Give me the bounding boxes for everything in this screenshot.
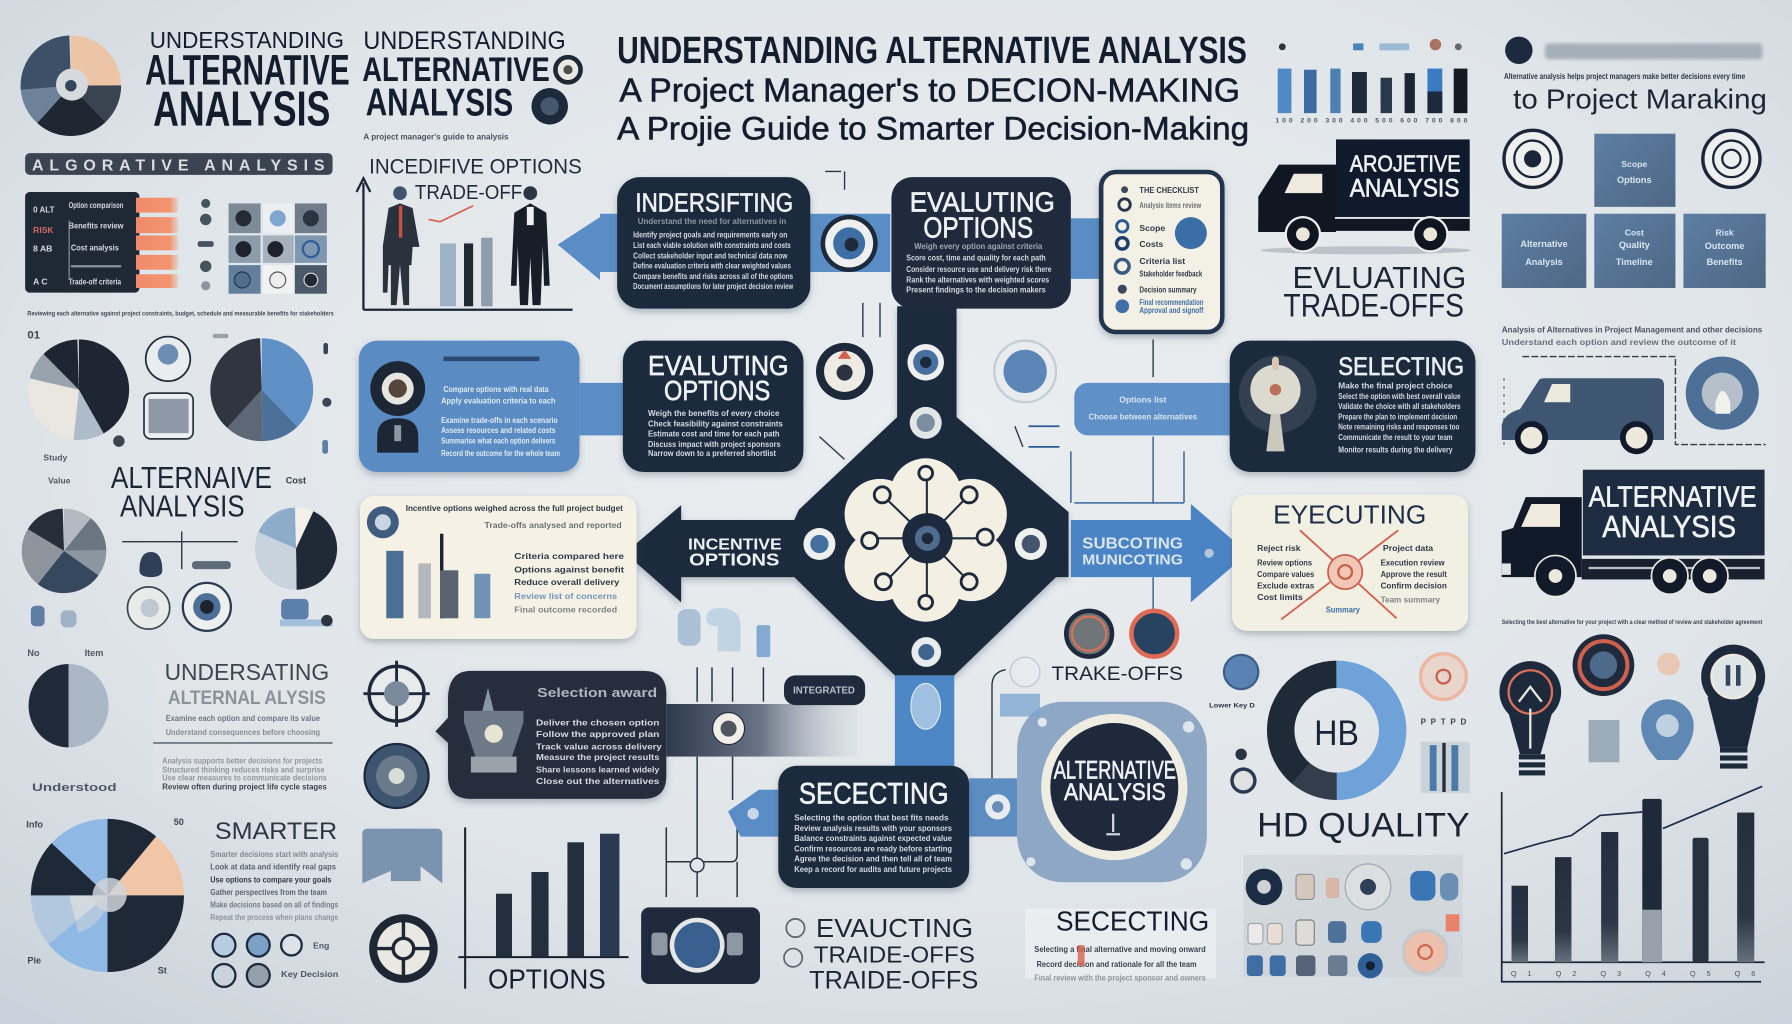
text block: understanding alternative analysis, faded: Understand consequences before choosing [166,727,320,737]
chart: bars and line, bottom right [1502,786,1765,982]
text block: understanding alternative analysis, faded: Use clear measures to communicate decisions [162,773,327,783]
panel: checklist card: Criteria list [1139,256,1185,266]
thin connector lines [1071,339,1184,626]
small glyphs around upper pies [113,334,331,454]
badge: alternative analysis circle: ALTERNATIVE [1054,756,1176,784]
tiles: blue-grey option cards: Outcome [1705,241,1744,251]
panel: selecting: Select the option with best overall value [1338,391,1461,401]
main title [617,29,1249,146]
panel: trophy dark card: Close out the alternatives [536,776,660,786]
panel: cream bar chart card: Final outcome recorded [514,605,617,615]
heading: understanding alternative analysis, second: UNDERSTANDING [363,27,566,55]
text block: understanding alternative analysis, faded: UNDERSATING [165,659,329,685]
icon: hub side badges [803,528,1047,560]
panel: evaluating options top: EVALUTING [910,186,1055,217]
text block: smarter with icons: Use options to compare your goals [210,874,332,884]
tiles: blue-grey option cards: Options [1617,175,1652,185]
heading: evaluating trade-offs, bottom center: TRAIDE-OFFS [814,941,975,967]
panel: evaluating options top: Present findings to the decision makers [906,285,1046,295]
donut chart: HD: HB [1314,713,1359,753]
panel: dark table with salmon bars: Cost analysis [71,242,119,252]
panel: eyecuting card with red cross: Project data [1383,543,1433,553]
heading: understanding alternative analysis, second: A project manager's guide to analysis [363,132,509,141]
panel: selecting: Make the final project choice [1338,381,1453,391]
panel: selecting, lower center: Review analysis results with your sponsors [794,823,952,833]
panel: peach trade-off badges [1051,611,1183,685]
text block: selecting, bottom: Selecting a final alternative and moving onward [1034,944,1206,954]
panel: selecting: SELECTING [1338,353,1464,381]
panel: eyecuting card with red cross: Execution review [1381,558,1445,568]
heading: evaluating trade-offs, bottom center: TRAIDE-OFFS [809,967,978,995]
bulb: left [1499,661,1561,775]
panel: trophy dark card: Share lessons learned widely [536,765,660,775]
rule of small text: Reviewing each alternative against project constraints, budget, schedule and measurable benefits for stakeholders [27,310,334,317]
icon grid: 3 by 3 tiles [229,203,327,294]
connector: icon panel with blue lens [641,907,760,984]
heading: evaluating trade-offs [1283,260,1466,324]
heading: HD quality: HD QUALITY [1257,807,1470,845]
icon column: small glyphs [198,199,214,290]
icons: pale devices above band [678,608,770,657]
panel: eyecuting card with red cross: Reject risk [1257,543,1301,553]
panel: trophy dark card: Deliver the chosen option [536,718,659,728]
panel: checklist card: Analysis items review [1139,200,1201,210]
panel: trophy dark card: Selection award [537,686,657,700]
small text near pies: 50 [174,817,184,827]
heading: evaluating trade-offs: EVLUATING [1293,260,1466,295]
panel: understanding: Identify project goals and requirements early on [633,230,787,240]
heading: alternative analysis, left middle: ALTERNAIVE [111,460,272,495]
arrow label: incentive options: OPTIONS [689,550,779,570]
panel: understanding [617,177,810,309]
connector: fading dark band with badge [666,704,857,757]
arrow: blue right pointing: MUNICOTING [1082,553,1183,569]
text lines above van [1502,325,1763,347]
text block: smarter with icons: Make decisions based on all of findings [210,899,338,909]
panel: checklist card: THE CHECKLIST [1139,185,1200,195]
text block: understanding alternative analysis, faded: Structured thinking reduces risks and surprise [162,765,325,775]
text lines above van: Understand each option and review the outcome of it [1502,337,1736,347]
panel: trophy dark card [435,671,666,799]
panel: selecting [1230,341,1475,472]
panel: eyecuting card with red cross: Approve the result [1381,569,1447,579]
text block: understanding alternative analysis, faded: ALTERNAL ALYSIS [168,687,326,709]
panel: cream bar chart card: Reduce overall delivery [514,577,620,587]
small text near pies: 01 [27,329,41,341]
small text near pies: Pie [27,955,41,965]
small labels left: Cost [286,475,306,485]
panel: dark table with salmon bars: 8 AB [33,243,52,253]
icon: red and white badge [816,343,873,400]
panel: eyecuting card with red cross: Compare values [1257,569,1314,579]
small labels left: Study [43,453,67,463]
panel: eyecuting card with red cross: Team summary [1381,594,1440,604]
badge: alternative analysis circle: ANALYSIS [1064,779,1166,806]
icon: lens badge between panels [821,215,878,272]
panel: selecting, lower center [728,766,1017,888]
heading: alternative analysis, left middle: ANALYSIS [120,489,245,524]
heading: evaluating trade-offs, bottom center [784,913,978,995]
heading: understanding alternative analysis, left [145,27,350,137]
panel: dark table with salmon bars [25,192,178,293]
panel: cream bar chart card [360,496,637,639]
icon: light bulbs and badges [1499,634,1765,775]
heading: understanding alternative analysis, second [362,27,566,141]
arrow: blue connector to evaluating options [579,383,639,435]
text block: smarter with icons: Eng [313,941,329,951]
panel: blue camera card: Summarise what each option delivers [441,435,556,445]
text lines above van: Analysis of Alternatives in Project Management and other decisions [1502,325,1763,335]
icons: target badges left of trophy panel [363,661,430,808]
pie chart: second left [54,365,104,415]
truck: arojective analysis [1258,139,1471,254]
pie chart: large bottom left [69,857,146,934]
person: left figure [383,186,419,305]
tiles: blue-grey option cards: Scope [1621,159,1647,169]
panel: selecting, lower center: Selecting the option that best fits needs [794,813,949,823]
panel: blue camera card [359,341,579,472]
panel: selecting: Prepare the plan to implement decision [1338,411,1457,421]
panel: evaluating options second: Discuss impact with project sponsors [648,439,781,449]
bulb: right [1701,645,1765,769]
panel: blue camera card: Record the outcome for the whole team [441,448,560,458]
panel: selecting, lower center: SECECTING [799,777,949,810]
panel: understanding: Understand the need for alternatives in [638,216,786,226]
panel: understanding: Compare benefits and risks across all of the options [633,271,793,281]
pie chart: half dark, half grey [29,664,109,747]
main title: A Projie Guide to Smarter Decision-Making [617,110,1249,146]
small marks around central stem [819,171,1059,459]
small text near pies: St [158,966,167,976]
text block: selecting, bottom: Final review with the project sponsor and owners [1034,973,1206,983]
panel: evaluating options second: EVALUTING [648,350,789,381]
panel: selecting, lower center: Keep a record for audits and future projects [794,864,952,874]
panel: checklist card: Scope [1139,223,1165,233]
panel: evaluating options top: OPTIONS [923,213,1033,245]
tiles: blue-grey option cards: Analysis [1525,257,1563,267]
icon: blue segmented circle [1686,357,1759,430]
panel: evaluating options second: Estimate cost and time for each path [648,429,779,439]
heading: understanding alternative analysis, left: UNDERSTANDING [150,27,344,53]
panel: selecting: Communicate the result to your team [1338,432,1453,442]
heading: alternative analysis, left middle [111,460,272,524]
text block: smarter with icons: Repeat the process when plans change [210,912,338,922]
heading: understanding alternative analysis, left: ALTERNATIVE [145,47,350,94]
panel: cream bar chart card: Criteria compared here [514,551,624,561]
icons around donut [1209,654,1470,793]
panel: understanding: Collect stakeholder input and technical data now [633,250,788,260]
icon: glass lens badge [994,341,1056,402]
heading: understanding alternative analysis, left: ANALYSIS [153,83,330,137]
panel: evaluating options second: Check feasibility against constraints [648,418,783,428]
callout: small dark pill: INTEGRATED [793,686,855,697]
panel: evaluating options top: Rank the alternatives with weighted scores [906,274,1049,284]
panel: cream bar chart card: Review list of concerns [514,591,617,601]
pie chart: dark and pale [275,528,317,569]
panel: selecting: Monitor results during the delivery [1338,445,1453,455]
panel: evaluating options top: Score cost, time and quality for each path [906,253,1046,263]
panel: checklist card: Final recommendation [1139,297,1203,307]
panel: dark table with salmon bars: Trade-off criteria [69,277,121,287]
panel: selecting, lower center: Balance constraints against expected value [794,833,952,843]
tiles: blue-grey option cards [1502,134,1766,288]
heading: evaluating trade-offs, bottom center: EVAUCTING [816,913,973,943]
small text near pies: Info [26,819,43,829]
panel: dark table with salmon bars: A C [33,277,48,287]
icon: stem badges [907,344,944,439]
text block: smarter with icons: Look at data and identify real gaps [210,862,336,872]
chart: bars and line, bottom right: Q1 Q2 Q3 Q4 Q5 Q6 [1511,969,1755,978]
arrow: blue band across top panels [558,214,1104,280]
truck: alternative analysis [1502,470,1765,597]
bar chart: top right columns: 100 200 300 400 500 600 700 800 [1275,117,1468,124]
callout: blue pill: Options list [1119,394,1167,404]
text block: smarter with icons: Smarter decisions start with analysis [210,849,338,859]
icon: target badges [1504,130,1760,187]
panel: evaluating options top: Consider resource use and delivery risk there [906,264,1052,274]
text block: understanding alternative analysis, faded: Examine each option and compare its value [166,713,320,723]
tiles: blue-grey option cards: Quality [1619,240,1651,250]
arrow label: incentive options [688,537,782,570]
text block: understanding alternative analysis, faded: Analysis supports better decisions for projects [162,755,322,765]
tiles: blue-grey option cards: Benefits [1707,257,1743,267]
panel: dark table with salmon bars: Benefits review [69,221,124,231]
van diagram with dashed frame [1502,357,1766,451]
panel: peach trade-off badges: TRAKE-OFFS [1051,663,1183,685]
thin connector tree, lower left of center [666,667,763,897]
panel: evaluating options second: OPTIONS [664,375,770,406]
panel: eyecuting card with red cross: Exclude extras [1257,581,1315,591]
panel: understanding: List each viable solution with constraints and costs [633,240,791,250]
panel: trophy dark card: Follow the approved plan [536,729,659,739]
pie chart: blue and dark [236,364,287,415]
bar chart: options [458,827,629,995]
callout: small dark pill [784,675,865,705]
panel: checklist card: Stakeholder feedback [1139,269,1202,279]
text block: smarter with icons: Key Decision [281,969,338,979]
text block: selecting, bottom: Record decision and rationale for all the team [1037,959,1197,969]
panel: blue camera card: Examine trade-offs in each scenario [441,415,558,425]
header: top right badge and blurred bar: Alternative analysis helps project managers make better decisions every time [1504,72,1746,81]
icon: chevron tile [362,829,442,883]
text block: understanding alternative analysis, faded [153,659,333,792]
panel: understanding: INDERSIFTING [635,187,793,217]
small text near pies [26,329,184,976]
small labels under half pie: No [27,648,40,658]
truck: alternative analysis: ALTERNATIVE [1589,481,1757,513]
text block: smarter with icons [210,818,338,987]
text block: selecting, bottom [1025,905,1216,983]
small labels under half pie: Understood [32,782,117,794]
text block: smarter with icons: Gather perspectives from the team [210,887,327,897]
heading: evaluating trade-offs: TRADE-OFFS [1283,288,1464,324]
heading: incentive options trade-off: TRADE-OFF [415,181,522,204]
panel: eyecuting card with red cross: Summary [1326,605,1360,615]
panel: evaluating options second: Narrow down to a preferred shortlist [648,448,776,458]
icon: round badge and mini report [144,337,193,439]
truck: arojective analysis: AROJETIVE [1350,150,1461,176]
panel: eyecuting card with red cross: Cost limits [1257,592,1303,602]
arrow: blue right pointing: SUBCOTING [1082,536,1183,553]
badge: alternative analysis circle [1017,702,1207,882]
icons around donut: PPTPD [1421,718,1467,727]
panel: evaluating options top: Weigh every option against criteria [914,241,1042,251]
main title: UNDERSTANDING ALTERNATIVE ANALYSIS [617,29,1247,71]
arrow: blue right pointing [1071,504,1248,602]
central hub: cream flower with spokes [845,458,1007,622]
heading: understanding alternative analysis, second: ALTERNATIVE [362,51,550,89]
panel: cream bar chart card: Trade-offs analysed and reported [485,520,622,530]
connector: blue lower stem [895,637,954,773]
panel: selecting, lower center: Confirm resources are ready before starting [794,843,952,853]
heading: understanding alternative analysis, second: ANALYSIS [366,81,513,124]
panel: dark table with salmon bars: 0 ALT [33,206,55,215]
panel: checklist card [1101,172,1222,332]
pie chart: top left [46,61,96,111]
tiles: blue-grey option cards: Timeline [1616,257,1653,267]
panel: eyecuting card with red cross: Confirm decision [1381,581,1447,591]
tiles: blue-grey option cards: Cost [1625,227,1644,237]
header: top right badge and blurred bar [1504,37,1762,81]
panel: selecting: Validate the choice with all stakeholders [1338,401,1461,411]
connector: dark stem and diamond hub [625,306,1069,675]
connector: pale blue tab above badge [992,657,1040,778]
icon: lens badges beside heading [531,57,581,125]
heading: incentive options trade-off [369,154,582,204]
panel: evaluating options second [623,341,803,472]
small labels left [43,453,306,485]
bar chart: top right columns [1275,39,1468,124]
small timeline and icons, left middle [31,531,333,631]
panel: blue camera card: Compare options with real data [443,384,549,394]
arrow label: incentive options: INCENTIVE [688,537,782,554]
tiles: blue-grey option cards: Alternative [1520,239,1568,249]
bar chart: options: OPTIONS [488,964,606,995]
panel: understanding: Document assumptions for later project decision review [633,281,793,291]
truck: arojective analysis: ANALYSIS [1350,175,1459,203]
text block: smarter with icons: SMARTER [215,818,337,845]
panel: trophy dark card: Track value across delivery [536,742,662,752]
panel: selecting, lower center: Agree the decision and then tell all of team [794,854,952,864]
tiles: blue-grey option cards: Risk [1716,227,1734,237]
person: right figure [511,186,550,305]
callout: blue pill [1074,383,1246,435]
pie chart: grey [43,530,85,572]
main title: A Project Manager's to DECION-MAKING [619,73,1240,110]
panel: evaluating options second: Weigh the benefits of every choice [648,408,780,418]
text block: understanding alternative analysis, faded: Review often during project life cycle stages [162,782,327,792]
panel: checklist card: Costs [1139,239,1163,249]
banner: alternative analysis strip: ALGORATIVE ANALYSIS [32,157,325,174]
heading: incentive options trade-off: INCEDIFIVE OPTIONS [369,154,582,179]
panel: selecting: Note remaining risks and responses too [1338,422,1459,432]
panel: evaluating options top [891,177,1071,309]
panel: dark table with salmon bars: Option comparison [69,200,123,210]
heading: to project marking: to Project Maraking [1513,84,1767,115]
panel: eyecuting card with red cross: Review options [1257,558,1312,568]
small labels under half pie [27,648,117,794]
panel: understanding: Define evaluation criteria with clear weighted values [633,261,791,271]
panel: checklist card: Decision summary [1139,285,1197,295]
panel: icon set grid [1243,855,1463,978]
callout: blue pill: Choose between alternatives [1089,411,1197,421]
chart: people and bars with axes [357,178,573,310]
panel: blue camera card: Assess resources and related costs [441,425,556,435]
icon: segmented dial [369,914,438,983]
icons around donut: Lower Key D [1209,702,1255,709]
truck: alternative analysis: ANALYSIS [1602,509,1736,544]
panel: cream bar chart card: Options against benefit [514,565,624,575]
small labels left: Value [48,475,71,485]
small labels under half pie: Item [85,648,103,658]
panel: eyecuting card with red cross: EYECUTING [1273,499,1426,529]
panel: blue camera card: Apply evaluation criteria to each [441,395,555,405]
panel: eyecuting card with red cross [1232,495,1468,631]
text block: selecting, bottom: SECECTING [1056,905,1209,936]
panel: cream bar chart card: Incentive options weighed across the full project budget [406,503,623,513]
panel: checklist card: Approval and signoff [1139,305,1204,315]
panel: trophy dark card: Measure the project results [536,752,660,762]
donut chart: HD [1281,674,1393,786]
panel: dark table with salmon bars: RISK [33,225,54,235]
